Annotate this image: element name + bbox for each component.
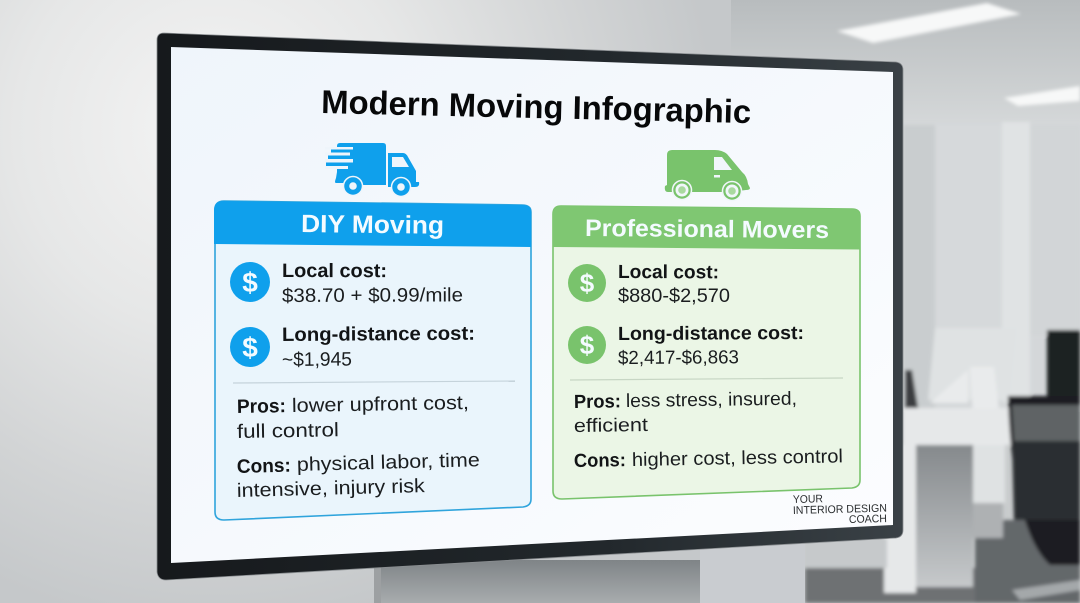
text: professional pros [574, 389, 797, 437]
text: long-distance cost [282, 323, 475, 371]
watermark: Your Interior Design Coach: YOUR [793, 493, 823, 506]
text: local cost: Local cost: [282, 260, 387, 282]
text: local cost [282, 260, 463, 307]
text: DIY pros: lower upfront cost, [292, 392, 469, 417]
text: DIY pros: Pros: [237, 395, 286, 418]
text: professional pros: efficient [574, 415, 649, 437]
text: long-distance cost: $2,417-$6,863 [618, 347, 739, 369]
icon: dollar long distance [230, 327, 270, 367]
text: local cost: $38.70 + $0.99/mile [282, 284, 463, 307]
text: professional pros: Pros: [574, 391, 621, 413]
text: DIY cons [237, 449, 480, 502]
header: Professional Movers: Professional Movers [585, 215, 829, 244]
watermark: Your Interior Design Coach [793, 493, 887, 526]
icon: green van [665, 150, 750, 200]
screen [171, 47, 893, 563]
header: DIY Moving: DIY Moving [301, 210, 444, 240]
icon: dollar local cost: $ [580, 268, 595, 298]
text: local cost: $880-$2,570 [618, 286, 730, 307]
title: Modern Moving Infographic [321, 83, 752, 130]
text: DIY pros [237, 392, 469, 443]
icon: dollar local cost [230, 262, 270, 302]
icon: dollar long distance: $ [242, 332, 258, 363]
text: local cost: Local cost: [618, 262, 719, 283]
text: long-distance cost [618, 323, 804, 369]
text: long-distance cost: ~$1,945 [282, 349, 352, 371]
text: long-distance cost: Long-distance cost: [618, 323, 804, 345]
text: DIY cons: intensive, injury risk [237, 475, 425, 502]
icon: dollar long distance: $ [580, 330, 595, 360]
text: DIY pros: full control [237, 419, 339, 443]
text: DIY cons: Cons: [237, 455, 291, 478]
watermark: Your Interior Design Coach: COACH [849, 513, 887, 526]
watermark: Your Interior Design Coach: INTERIOR DESIGN [793, 503, 887, 517]
icon: dollar local cost [568, 264, 606, 302]
text: professional cons: Cons: [574, 450, 626, 472]
header: DIY Moving [214, 201, 531, 247]
header: Professional Movers [553, 206, 860, 250]
monitor frame [157, 33, 903, 580]
icon: blue moving truck [325, 143, 419, 196]
text: local cost [618, 262, 730, 307]
panel: Professional Movers [553, 206, 860, 499]
icon: dollar long distance [568, 326, 606, 364]
monitor stand [374, 530, 805, 603]
icon: dollar local cost: $ [242, 267, 258, 298]
text: professional pros: less stress, insured, [626, 389, 797, 412]
text: professional cons: higher cost, less control [632, 446, 843, 471]
text: long-distance cost: Long-distance cost: [282, 323, 475, 346]
text: DIY cons: physical labor, time [297, 449, 480, 476]
panel: DIY Moving [214, 201, 531, 520]
